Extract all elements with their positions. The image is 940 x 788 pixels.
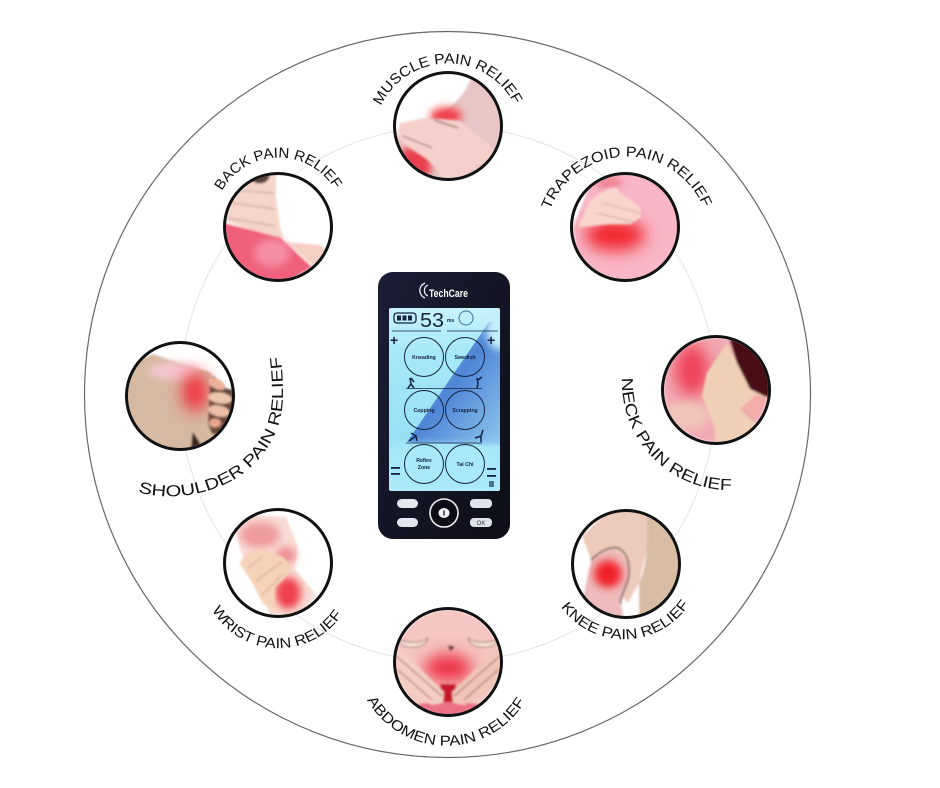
battery and timer: ms <box>447 318 454 324</box>
photo: shoulder pain <box>125 341 235 451</box>
photo: back pain <box>224 173 332 287</box>
mode buttons <box>404 338 484 484</box>
photo: neck pain <box>662 336 776 450</box>
label: wrist pain relief: WRIST PAIN RELIEF <box>214 604 338 648</box>
mode labels: Cupping <box>413 408 435 414</box>
screen <box>389 308 500 491</box>
device: TechCare TENS unit <box>378 272 514 539</box>
label: muscle pain relief: MUSCLE PAIN RELIEF <box>372 54 523 105</box>
label: neck pain relief: NECK PAIN RELIEF <box>622 379 732 490</box>
logo: TechCare <box>429 288 468 300</box>
label: shoulder pain relief: SHOULDER PAIN RELIEF <box>139 358 283 496</box>
device controls <box>397 499 492 527</box>
photo: knee pain <box>572 508 686 620</box>
mode labels: Zone <box>418 465 430 471</box>
outer circle <box>84 32 810 758</box>
mode labels <box>412 355 478 471</box>
photo: abdomen pain <box>394 608 502 716</box>
logo <box>420 283 468 300</box>
label: knee pain relief: KNEE PAIN RELIEF <box>562 599 686 640</box>
photo: trapezoid pain <box>570 172 680 282</box>
device controls: OK <box>477 521 485 527</box>
mode labels: Kneading <box>412 355 436 361</box>
battery and timer: 53 <box>420 310 444 332</box>
mode labels: Scrapping <box>452 408 478 414</box>
battery and timer <box>390 310 498 487</box>
battery and timer: + <box>390 332 398 348</box>
photo: wrist pain <box>224 510 332 617</box>
mode labels: Swedish <box>454 355 476 361</box>
battery and timer: + <box>487 332 495 348</box>
photo: muscle pain <box>394 72 508 186</box>
body figures <box>408 377 483 442</box>
label: back pain relief: BACK PAIN RELIEF <box>214 148 342 190</box>
label: abdomen pain relief: ABDOMEN PAIN RELIEF <box>367 696 522 746</box>
mode labels: Tai Chi <box>457 462 474 468</box>
label: trapezoid pain relief: TRAPEZOID PAIN RELIEF <box>541 146 712 206</box>
mode labels: Reflex <box>416 458 432 464</box>
